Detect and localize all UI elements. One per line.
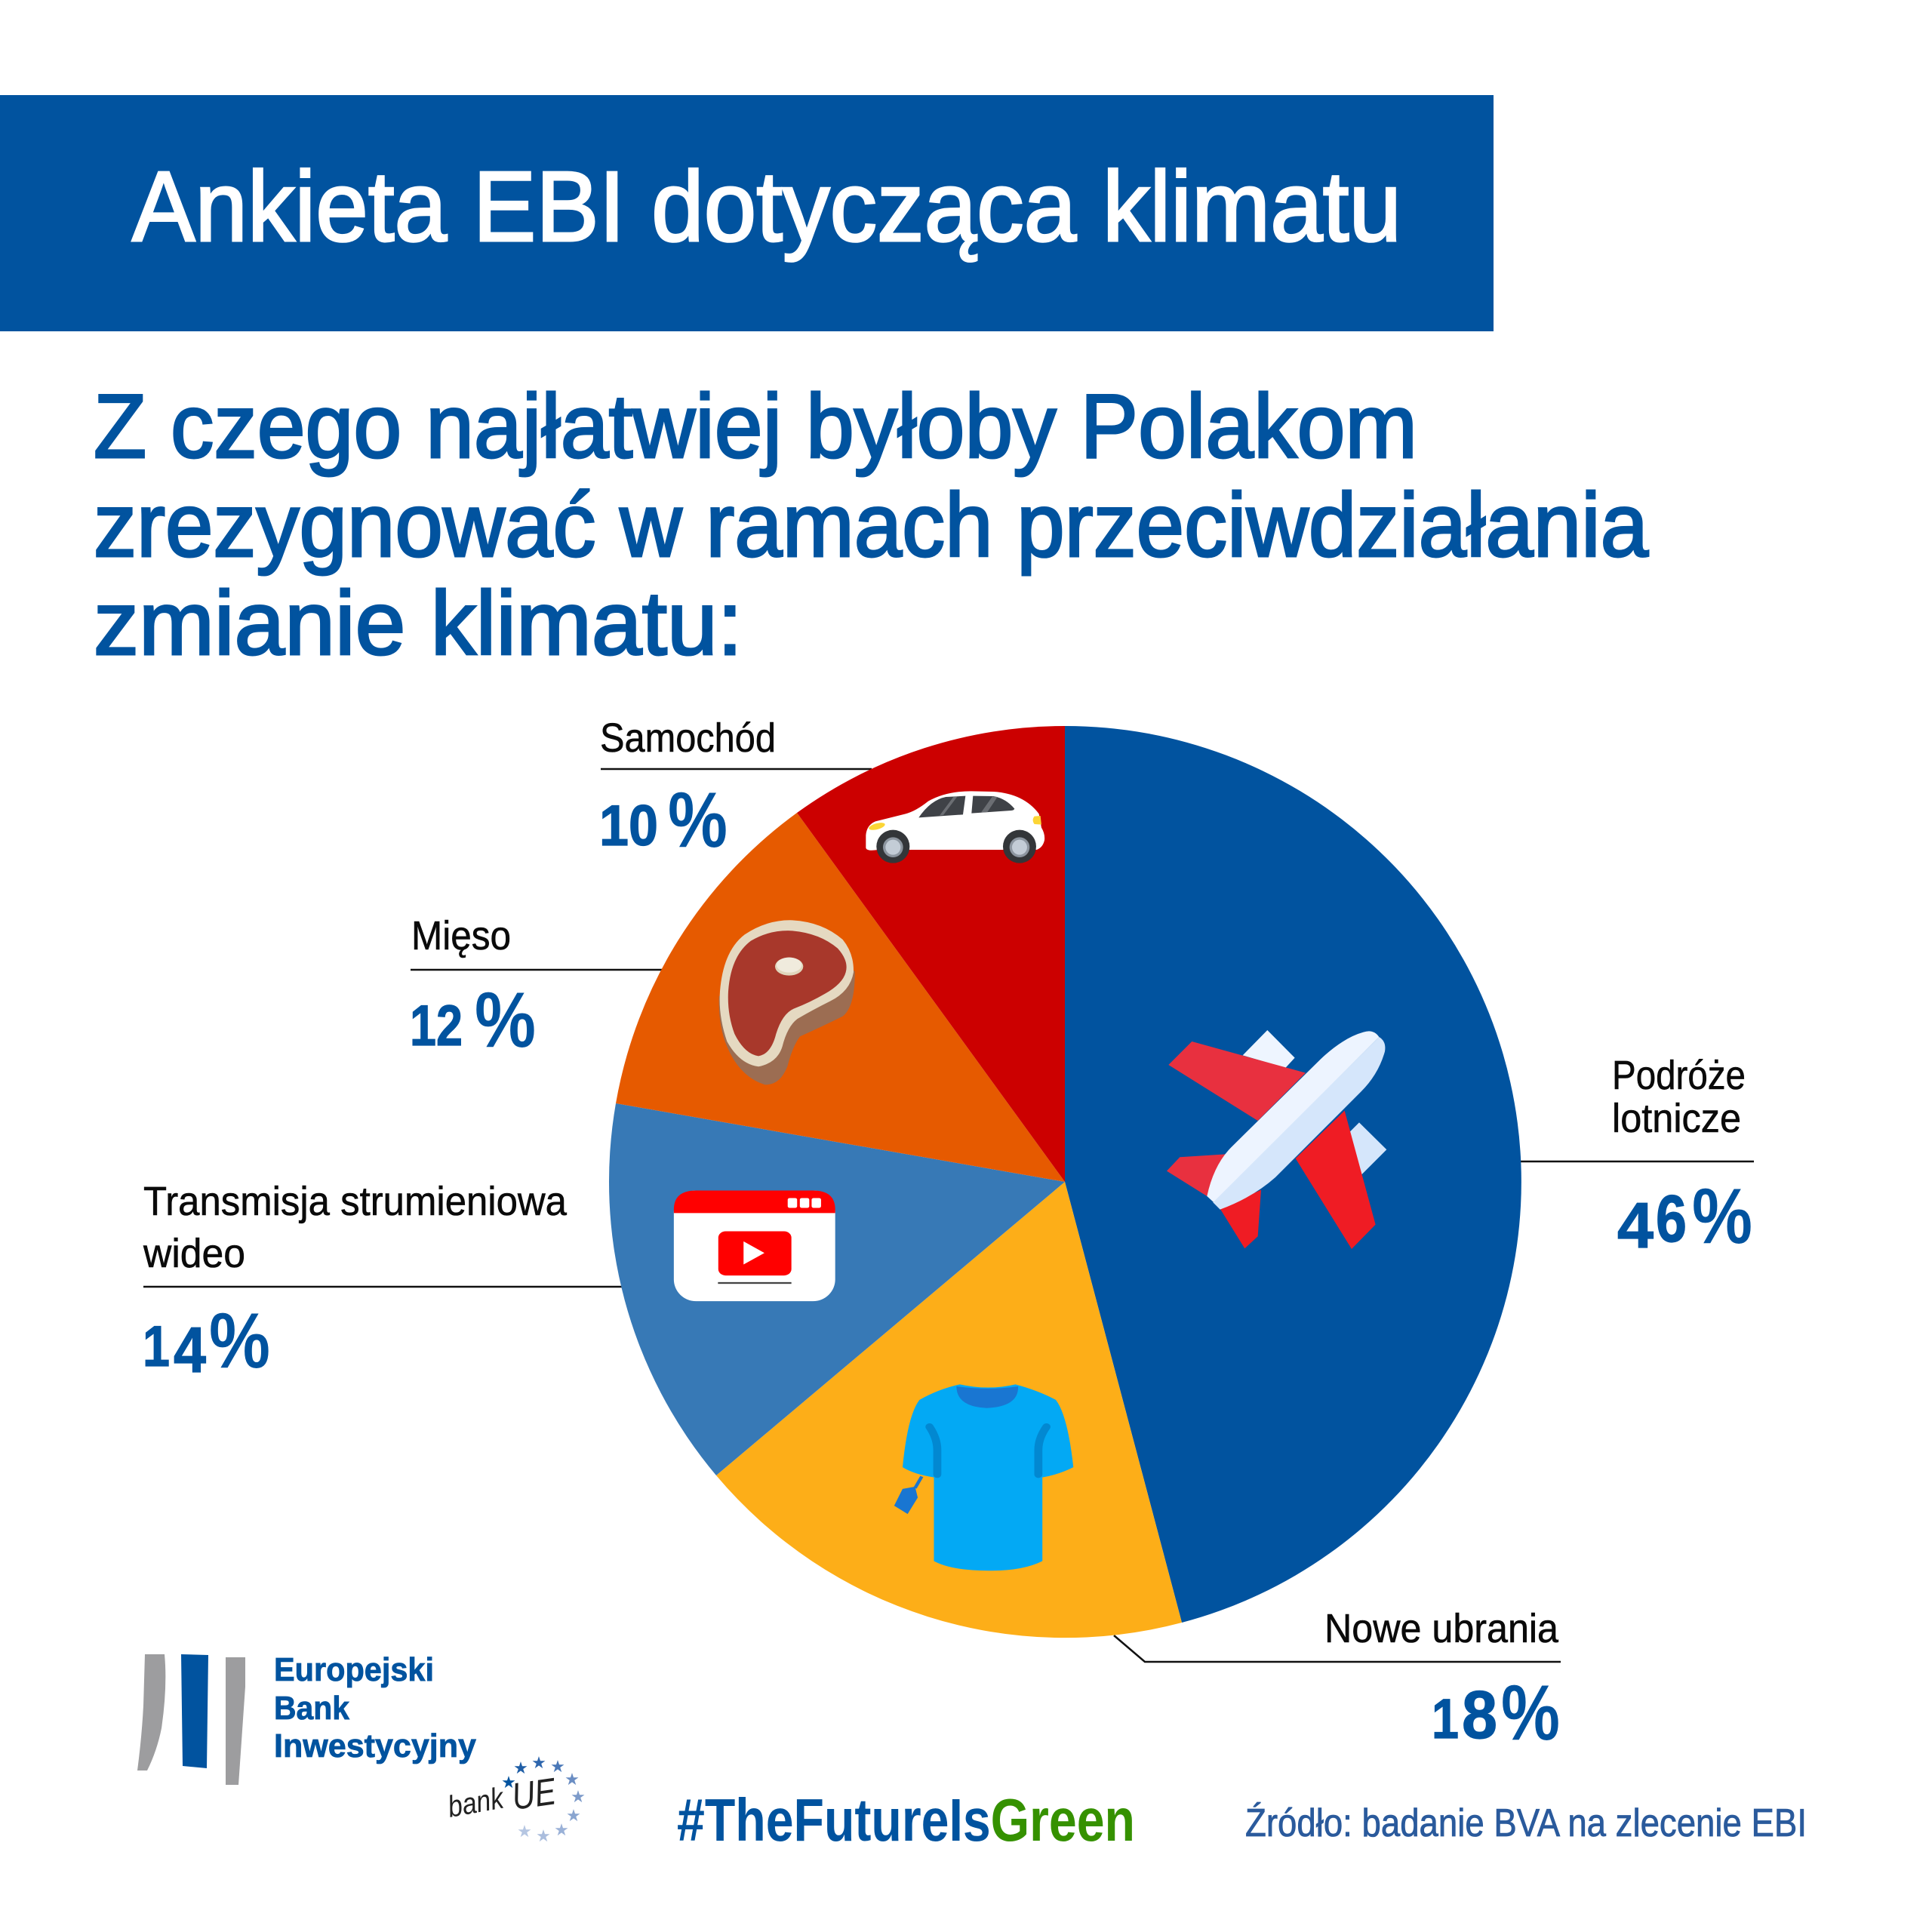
logo: bank UE with stars: ★ — [550, 1758, 565, 1777]
label: air travel 46%: lotnicze — [1612, 1096, 1741, 1141]
logo: bank UE with stars: bank — [445, 1781, 507, 1824]
logo: bank UE with stars: ★ — [565, 1770, 580, 1789]
label: new clothes 18%: % — [1501, 1669, 1560, 1757]
logo: European Investment Bank: Inwestycyjny — [274, 1727, 477, 1764]
label: video streaming 14% — [143, 1179, 568, 1386]
logo: bank UE with stars — [445, 1754, 586, 1846]
title banner — [0, 95, 1494, 331]
label: car 10% — [599, 715, 776, 864]
label: car 10%: Samochód — [600, 715, 776, 761]
hashtag: #TheFutureIsGreen — [677, 1786, 1135, 1854]
slice: air travel 46% — [1065, 726, 1521, 1623]
label: air travel 46%: % — [1692, 1173, 1752, 1260]
label: new clothes 18%: Nowe ubrania — [1324, 1606, 1559, 1651]
logo: bank UE with stars: ★ — [566, 1807, 581, 1826]
label: air travel 46%: Podróże — [1612, 1053, 1746, 1098]
icon: t-shirt — [894, 1384, 1073, 1571]
label: car 10%: % — [668, 777, 728, 864]
title banner: Ankieta EBI dotycząca klimatu — [132, 151, 1401, 262]
logo: bank UE with stars: UE — [509, 1770, 558, 1818]
icon: car — [866, 791, 1044, 863]
leader lines — [143, 769, 1754, 1662]
label: car 10%: 10 — [599, 794, 658, 858]
label: meat 12%: Mięso — [411, 913, 511, 958]
logo: bank UE with stars: ★ — [531, 1754, 546, 1773]
label: meat 12%: 12 — [410, 994, 463, 1058]
logo: bank UE with stars: ★ — [501, 1774, 516, 1792]
label: video streaming 14%: 4 — [174, 1315, 206, 1386]
label: air travel 46%: 6 — [1656, 1181, 1687, 1256]
label: new clothes 18%: 1 — [1432, 1687, 1459, 1750]
slice: video streaming 14% — [609, 1103, 1065, 1475]
slice: car 10% — [797, 726, 1065, 1182]
label: air travel 46%: 4 — [1617, 1190, 1654, 1262]
label: meat 12% — [410, 913, 536, 1064]
icon: video player — [674, 1191, 835, 1301]
logo: European Investment Bank — [137, 1651, 477, 1785]
logo: bank UE with stars: ★ — [536, 1827, 551, 1846]
heading: question — [94, 376, 1648, 674]
label: video streaming 14%: Transmisja strumieniowa — [143, 1179, 568, 1224]
icon: steak — [719, 920, 855, 1084]
heading: question: zmianie klimatu: — [94, 573, 743, 674]
pie chart — [609, 726, 1521, 1638]
logo: bank UE with stars: ★ — [513, 1759, 528, 1778]
label: new clothes 18% — [1324, 1606, 1560, 1757]
logo: European Investment Bank: Bank — [274, 1690, 349, 1727]
logo: bank UE with stars: ★ — [571, 1788, 586, 1807]
label: meat 12%: % — [475, 977, 536, 1064]
label: video streaming 14%: 1 — [143, 1315, 170, 1379]
slice: meat 12% — [616, 813, 1065, 1182]
source note: Źródło: badanie BVA na zlecenie EBI — [1245, 1801, 1807, 1845]
logo: European Investment Bank: Europejski — [274, 1651, 434, 1688]
heading: question: Z czego najłatwiej byłoby Polakom — [94, 376, 1417, 477]
logo: bank UE with stars: ★ — [554, 1821, 569, 1840]
label: air travel 46% — [1612, 1053, 1752, 1262]
logo: bank UE with stars: ★ — [517, 1823, 532, 1841]
heading: question: zrezygnować w ramach przeciwdziałania — [94, 475, 1648, 576]
label: video streaming 14%: wideo — [143, 1231, 245, 1276]
label: new clothes 18%: 8 — [1462, 1678, 1497, 1753]
icon: airplane — [1167, 1030, 1386, 1249]
label: video streaming 14%: % — [209, 1297, 270, 1385]
slice: new clothes 18% — [716, 1182, 1182, 1638]
